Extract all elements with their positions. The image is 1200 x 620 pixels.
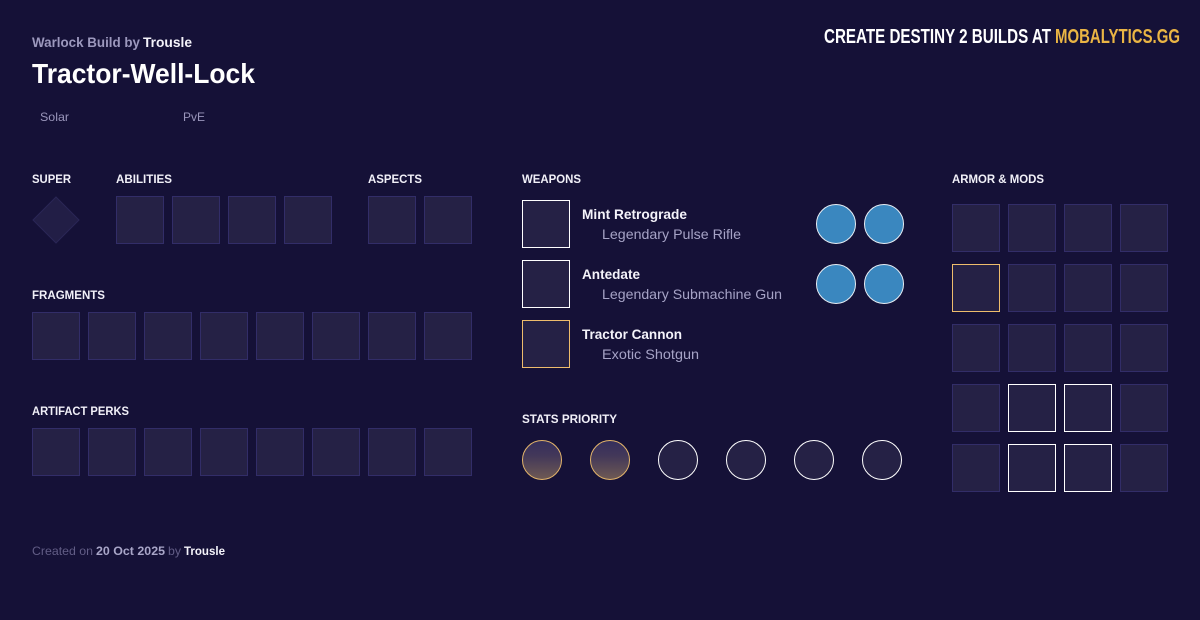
weapon: Tractor Cannon	[522, 320, 699, 368]
heading: abilities: ABILITIES	[116, 172, 172, 186]
footer: creation credit: by	[168, 544, 181, 558]
aspects slots	[368, 196, 472, 244]
abilities slots	[116, 196, 332, 244]
title: Tractor-Well-Lock	[32, 58, 255, 89]
weapon: Antedate: Antedate	[582, 266, 640, 282]
footer: creation credit	[32, 544, 225, 558]
weapon: Mint Retrograde: Mint Retrograde	[582, 206, 687, 222]
icon: super diamond	[33, 197, 79, 243]
weapon: Mint Retrograde: Legendary Pulse Rifle	[602, 226, 741, 242]
tag: PvE: PvE	[183, 110, 205, 124]
footer: creation credit: Created on	[32, 544, 93, 558]
fragments slots	[32, 312, 472, 360]
header: build byline: Warlock Build by	[32, 34, 140, 50]
footer: creation credit: 20 Oct 2025	[96, 544, 165, 558]
promo banner: CREATE DESTINY 2 BUILDS AT	[824, 26, 1051, 48]
weapon: Mint Retrograde	[522, 200, 904, 248]
header: build byline: Trousle	[143, 34, 192, 50]
heading: armor and mods: ARMOR & MODS	[952, 172, 1044, 186]
heading: weapons: WEAPONS	[522, 172, 581, 186]
heading: aspects: ASPECTS	[368, 172, 422, 186]
weapon: Antedate	[522, 260, 904, 308]
stats priority circles	[522, 440, 902, 480]
footer: creation credit: Trousle	[184, 544, 225, 558]
armor and mods grid	[952, 204, 1168, 492]
heading: fragments: FRAGMENTS	[32, 288, 105, 302]
tag: Solar: Solar	[40, 110, 69, 124]
weapon: Tractor Cannon: Tractor Cannon	[582, 326, 682, 342]
heading: stats priority: STATS PRIORITY	[522, 412, 617, 426]
weapon: Tractor Cannon: Exotic Shotgun	[602, 346, 699, 362]
artifact perks slots	[32, 428, 472, 476]
heading: super: SUPER	[32, 172, 71, 186]
heading: artifact perks: ARTIFACT PERKS	[32, 404, 129, 418]
weapon: Antedate: Legendary Submachine Gun	[602, 286, 782, 302]
